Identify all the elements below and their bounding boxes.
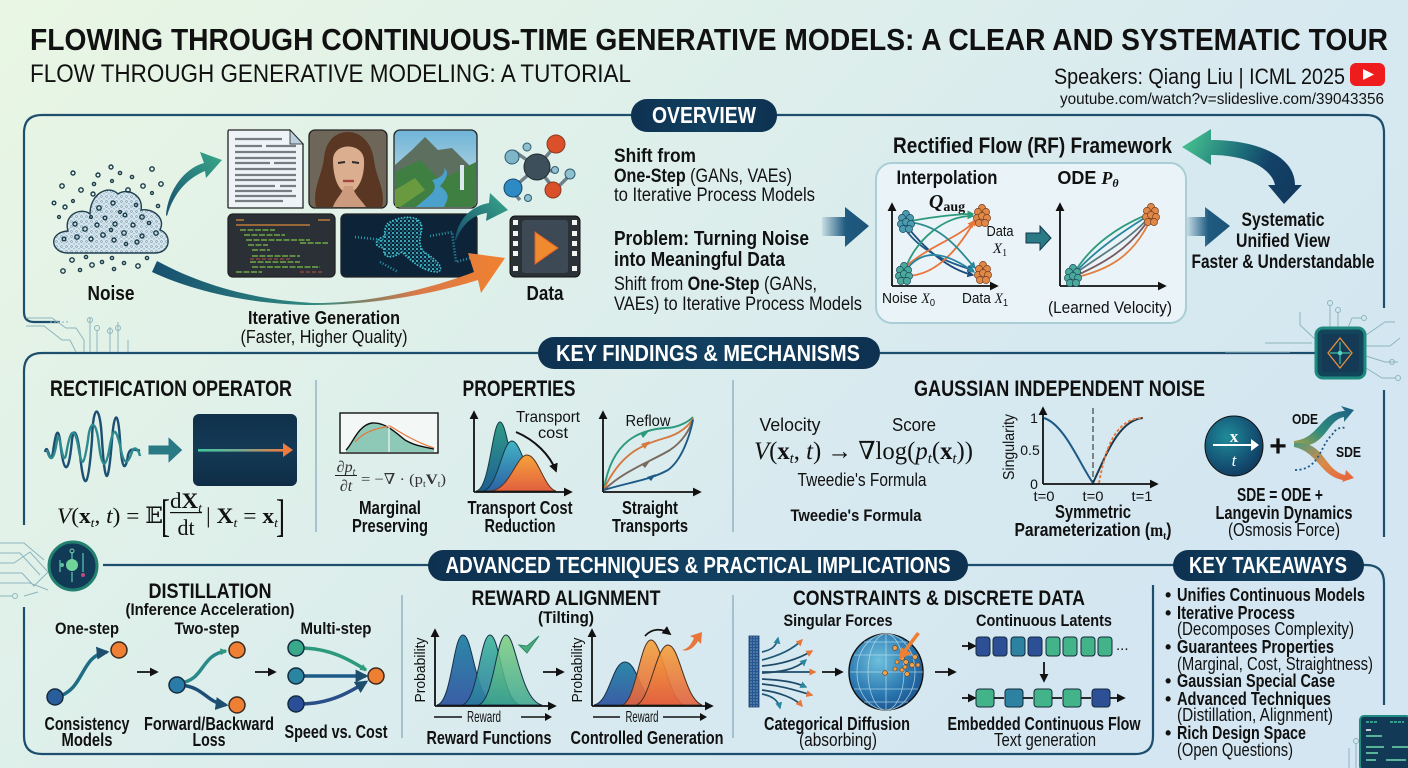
label: singular forces: Singular Forces xyxy=(784,611,892,630)
labels: consistency, loss, speed: Speed vs. Cost xyxy=(284,722,388,742)
text block: shift and problem: Problem: Turning Noise xyxy=(614,228,809,250)
arrow: to systematic view xyxy=(1187,207,1230,247)
arrow: forces to globe xyxy=(822,671,842,673)
labels: consistency, loss, speed: Consistency xyxy=(44,714,130,734)
labels: categorical diffusion: (absorbing) xyxy=(799,730,877,750)
formula: velocity expectation: t) = 𝔼 xyxy=(106,503,160,528)
icon: terminal bottom right xyxy=(1360,716,1408,768)
icon: video film xyxy=(510,216,580,277)
label: learned velocity: (Learned Velocity) xyxy=(1048,298,1172,317)
takeaway list: Gaussian Special Case xyxy=(1177,671,1335,691)
chart: singularity: t=0 xyxy=(1034,488,1055,504)
icon: noise cloud xyxy=(52,165,168,273)
video url: youtube.com/watch?v=slideslive.com/39043356 xyxy=(1060,91,1384,108)
pill heading: key findings: KEY FINDINGS & MECHANISMS xyxy=(556,340,860,366)
formula: velocity to score: )) xyxy=(957,438,973,465)
image: code screen xyxy=(228,214,335,277)
chart: controlled generation xyxy=(569,630,712,726)
divider xyxy=(732,380,734,532)
formula: continuity: ∂t xyxy=(340,478,353,495)
heading: rectification operator: RECTIFICATION OPERATOR xyxy=(50,376,292,401)
bullets: • xyxy=(1165,603,1171,623)
labels: consistency, loss, speed: Forward/Backward xyxy=(144,714,274,734)
bullets: • xyxy=(1165,585,1171,605)
chart: interpolation paths: 1 xyxy=(1002,248,1007,259)
label: tweedie's formula bold: Tweedie's Formula xyxy=(790,506,922,525)
formula: velocity expectation: = xyxy=(237,503,262,528)
label: symmetric parameterization xyxy=(1014,502,1172,542)
chart: reward functions: Probability xyxy=(412,637,429,702)
formula: velocity expectation xyxy=(57,488,285,541)
plus sign: + xyxy=(1269,430,1287,463)
formula: continuity: t xyxy=(423,479,426,489)
labels: consistency, loss, speed xyxy=(44,714,388,750)
label: noise: Noise xyxy=(88,283,134,305)
takeaway list: Advanced Techniques xyxy=(1177,689,1331,709)
pill heading: key takeaways: KEY TAKEAWAYS xyxy=(1189,552,1347,578)
image: landscape xyxy=(394,130,477,208)
chart: interpolation paths: Data X xyxy=(962,290,1004,307)
label: SDE equals ODE plus Langevin: SDE = ODE + xyxy=(1237,485,1323,505)
formula: Q aug: aug xyxy=(943,200,965,215)
pill heading: overview: OVERVIEW xyxy=(652,102,756,128)
chart: transport cost xyxy=(474,409,581,492)
chart: controlled generation: Reward xyxy=(626,709,658,726)
subtitle: FLOW THROUGH GENERATIVE MODELING: A TUTORIAL xyxy=(30,60,631,88)
heading: RF framework: Rectified Flow (RF) Framework xyxy=(893,133,1173,158)
chart: singularity: Singularity xyxy=(1001,414,1018,480)
formula: continuity: t xyxy=(438,479,441,489)
chart: singularity: 1 xyxy=(1030,410,1038,426)
image: portrait xyxy=(309,130,387,208)
formula: velocity expectation: ] xyxy=(276,490,285,541)
panel: distillation xyxy=(44,580,388,750)
formula: velocity expectation: dX xyxy=(170,488,197,513)
label: tweedie's formula: Tweedie's Formula xyxy=(798,470,927,490)
divider xyxy=(315,380,317,532)
formula: velocity expectation: t xyxy=(91,515,95,530)
arrow: functions to generation xyxy=(543,671,563,673)
arrow: iterative generation xyxy=(152,253,505,305)
panel: gaussian independent noise xyxy=(754,376,1361,542)
icon: globe xyxy=(849,632,923,710)
chart: singularity xyxy=(1001,408,1157,504)
label: SDE equals ODE plus Langevin: Langevin Dynamics xyxy=(1216,503,1352,523)
label: controlled generation: Controlled Generation xyxy=(570,728,724,748)
label: SDE equals ODE plus Langevin xyxy=(1216,485,1352,540)
bullets: • xyxy=(1165,637,1171,657)
formula: velocity to score: , xyxy=(794,438,806,465)
label: SDE equals ODE plus Langevin: (Osmosis Force) xyxy=(1228,520,1340,540)
labels: embedded flow: Text generation xyxy=(994,730,1096,750)
labels: consistency, loss, speed: Models xyxy=(62,730,112,750)
text block: shift and problem: Shift from One-Step (GANs, xyxy=(614,274,817,295)
icon: x over t ball xyxy=(1205,416,1263,476)
label: transport cost reduction xyxy=(468,498,573,536)
labels: step counts: One-step xyxy=(55,619,119,638)
heading: gaussian independent noise: GAUSSIAN INDEPENDENT NOISE xyxy=(914,376,1205,401)
arrow: interpolation to ODE xyxy=(1026,226,1051,250)
arrow: to RF framework xyxy=(822,207,869,247)
icon: ODE SDE branches: ODE xyxy=(1292,411,1318,428)
label: ODE P theta: ODE P xyxy=(1057,168,1112,188)
chart: singularity: t=0 xyxy=(1082,488,1104,504)
label: marginal preserving: Marginal xyxy=(359,498,421,518)
formula: velocity to score: V(x xyxy=(754,438,790,465)
formula: continuity: = −∇ · (p xyxy=(361,472,417,488)
arrow: curved feedback xyxy=(1182,129,1302,204)
heading: distillation: (Inference Acceleration) xyxy=(126,600,294,619)
chart: interpolation paths: 1 xyxy=(1003,298,1008,309)
formula: velocity expectation: t xyxy=(274,515,278,530)
takeaway list: Iterative Process xyxy=(1177,603,1295,623)
arrow: globe to latents xyxy=(935,671,955,673)
labels: velocity and score: Velocity xyxy=(760,415,820,435)
label: data: Data xyxy=(526,283,564,305)
label: symmetric parameterization: ) xyxy=(1166,520,1172,540)
arrow: noise to document xyxy=(166,152,222,216)
divider xyxy=(732,595,734,738)
bullets: • xyxy=(1165,671,1171,691)
icon: ODE SDE branches: SDE xyxy=(1336,444,1361,461)
chart: ODE learned velocity xyxy=(1060,203,1165,287)
bullets xyxy=(1165,585,1171,743)
label: transport cost reduction: Transport Cost xyxy=(468,498,573,518)
labels: step counts: Two-step xyxy=(174,619,240,638)
formula: velocity expectation: , xyxy=(95,503,106,528)
panel: constraints and discrete data xyxy=(749,587,1141,750)
text block: shift and problem: VAEs) to Iterative Process Models xyxy=(614,294,862,315)
panel: RF framework xyxy=(876,163,1186,323)
labels: velocity and score: Score xyxy=(892,415,936,435)
chart: reflow: Reflow xyxy=(626,413,671,430)
pill heading: advanced techniques: ADVANCED TECHNIQUES & PRACTICAL IMPLICATIONS xyxy=(446,552,950,578)
label: marginal preserving xyxy=(352,498,428,536)
arrow: small data arrow xyxy=(455,193,508,240)
text block: systematic unified view xyxy=(1192,210,1374,273)
icon: straight line box xyxy=(193,414,297,486)
label: straight transports: Straight xyxy=(622,498,678,518)
formula: velocity expectation: [ xyxy=(161,490,170,541)
chart: transport cost: cost xyxy=(538,425,569,442)
takeaway list: (Marginal, Cost, Straightness) xyxy=(1177,654,1373,674)
formula: continuity: t xyxy=(353,467,356,478)
formula: velocity to score: t xyxy=(952,451,957,467)
heading: constraints: CONSTRAINTS & DISCRETE DATA xyxy=(793,587,1085,610)
takeaway list: Rich Design Space xyxy=(1177,723,1306,743)
icon: ODE SDE branches xyxy=(1292,406,1361,482)
formula: continuity: ) xyxy=(440,472,446,488)
formula: velocity expectation: dt xyxy=(177,515,195,540)
formula: velocity to score: x xyxy=(940,438,953,465)
diagram: multi-step xyxy=(288,640,384,712)
panel: overview noise to data xyxy=(52,130,580,347)
arrow: two to multi xyxy=(255,671,275,673)
label: symmetric parameterization: t xyxy=(1163,530,1167,542)
diagram: continuous latents xyxy=(962,637,1129,681)
labels: embedded flow xyxy=(948,714,1141,750)
icon: molecule xyxy=(504,135,575,202)
text block: shift and problem: to Iterative Process Models xyxy=(614,185,815,206)
bullets: • xyxy=(1165,689,1171,709)
formula: velocity expectation: x xyxy=(262,503,274,528)
labels: categorical diffusion xyxy=(764,714,910,750)
chart: interpolation paths: X xyxy=(993,241,1002,257)
chart: controlled generation: Probability xyxy=(569,637,586,702)
icon: source bar and force arrows xyxy=(749,636,815,708)
chart: transport cost: Transport xyxy=(516,409,581,426)
label: straight transports xyxy=(612,498,688,536)
icon: document xyxy=(228,130,303,208)
chart: singularity: t=1 xyxy=(1132,488,1153,504)
chart: interpolation paths xyxy=(882,204,1014,309)
text block: systematic unified view: Unified View xyxy=(1236,231,1330,252)
panel: rectification operator xyxy=(45,376,297,541)
text block: systematic unified view: Systematic xyxy=(1242,210,1325,231)
label: iterative generation xyxy=(240,308,408,347)
arrow: one to two xyxy=(137,671,157,673)
icon: circuit circle left xyxy=(49,542,97,590)
takeaway list xyxy=(1177,585,1373,760)
icon: circuit chip top right xyxy=(1316,328,1365,378)
chart: marginal preserving xyxy=(340,413,438,453)
panel: properties xyxy=(335,376,700,536)
text block: shift and problem: One-Step (GANs, VAEs) xyxy=(614,166,792,187)
text block: shift and problem: Shift from xyxy=(614,146,696,167)
formula: continuity: ∂p xyxy=(337,459,353,476)
labels: step counts: Multi-step xyxy=(300,619,372,638)
label: iterative generation: (Faster, Higher Quality) xyxy=(240,327,408,347)
label: iterative generation: Iterative Generation xyxy=(248,308,400,328)
chart: reward functions: Reward xyxy=(467,709,501,726)
chart: reward functions xyxy=(412,630,555,726)
bullets: • xyxy=(1165,723,1171,743)
formula: velocity to score: t) → ∇log(p xyxy=(806,438,928,465)
chart: singularity: 0.5 xyxy=(1020,442,1040,458)
icon: x over t ball: t xyxy=(1232,451,1238,470)
diagram: continuous latents: ... xyxy=(1116,637,1129,654)
takeaway list: Guarantees Properties xyxy=(1177,637,1334,657)
label: interpolation: Interpolation xyxy=(896,168,998,189)
formula: Q aug: Q xyxy=(929,191,943,213)
labels: embedded flow: Embedded Continuous Flow xyxy=(948,714,1141,734)
chart: reflow xyxy=(603,412,700,492)
chart: interpolation paths: Data xyxy=(986,223,1014,240)
image: point cloud xyxy=(341,214,477,277)
icon: wave signal xyxy=(45,412,140,481)
label: continuous latents: Continuous Latents xyxy=(976,611,1112,630)
label: symmetric parameterization: Symmetric xyxy=(1055,502,1131,522)
takeaway list: (Decomposes Complexity) xyxy=(1177,619,1354,639)
formula: velocity to score: t xyxy=(790,451,795,467)
arrow: wave to line xyxy=(148,436,183,464)
label: marginal preserving: Preserving xyxy=(352,516,428,536)
labels: step counts xyxy=(55,619,372,638)
formula: velocity expectation: t xyxy=(198,500,202,515)
divider xyxy=(401,595,403,738)
diagram: two-step xyxy=(169,642,245,713)
icon: x over t ball: x xyxy=(1230,427,1239,446)
heading: distillation xyxy=(126,580,294,619)
heading: properties: PROPERTIES xyxy=(462,376,576,401)
formula: velocity to score: ( xyxy=(932,438,940,465)
formula: continuity: V xyxy=(426,472,438,488)
labels: categorical diffusion: Categorical Diffusion xyxy=(764,714,910,734)
formula: velocity expectation: | X xyxy=(206,503,232,528)
pill heading: overview xyxy=(631,99,777,132)
takeaway list: (Open Questions) xyxy=(1177,740,1293,760)
text block: shift and problem: into Meaningful Data xyxy=(614,249,786,271)
label: ODE P theta: θ xyxy=(1112,176,1119,190)
diagram: one-step xyxy=(47,642,127,705)
labels: velocity and score xyxy=(760,415,936,435)
heading: distillation: DISTILLATION xyxy=(148,580,272,603)
formula: velocity to score: t xyxy=(928,451,933,467)
formula: continuity xyxy=(335,459,446,495)
formula: velocity expectation: t xyxy=(234,515,238,530)
chart: singularity: 0 xyxy=(1030,476,1038,492)
diagram: embedded continuous flow xyxy=(962,689,1124,707)
panel: reward alignment xyxy=(412,587,724,748)
labels: consistency, loss, speed: Loss xyxy=(192,730,226,750)
text block: shift and problem xyxy=(614,146,862,315)
takeaway list: (Distillation, Alignment) xyxy=(1177,705,1333,725)
label: straight transports: Transports xyxy=(612,516,688,536)
chart: interpolation paths: Noise X xyxy=(882,290,931,307)
heading: reward alignment: REWARD ALIGNMENT xyxy=(472,587,661,610)
circuit decorations xyxy=(0,300,1400,768)
formula: velocity expectation: V(x xyxy=(57,503,90,528)
panel: key takeaways xyxy=(1165,585,1373,760)
speakers line: Speakers: Qiang Liu | ICML 2025 xyxy=(1054,64,1345,89)
takeaway list: Unifies Continuous Models xyxy=(1177,585,1365,605)
label: transport cost reduction: Reduction xyxy=(484,516,556,536)
heading: reward alignment: (Tilting) xyxy=(538,608,594,627)
icon: youtube xyxy=(1350,63,1385,86)
chart: interpolation paths: 0 xyxy=(930,298,935,309)
label: reward functions: Reward Functions xyxy=(426,728,552,748)
label: symmetric parameterization: Parameterization (m xyxy=(1014,520,1171,540)
heading: reward alignment xyxy=(472,587,661,627)
